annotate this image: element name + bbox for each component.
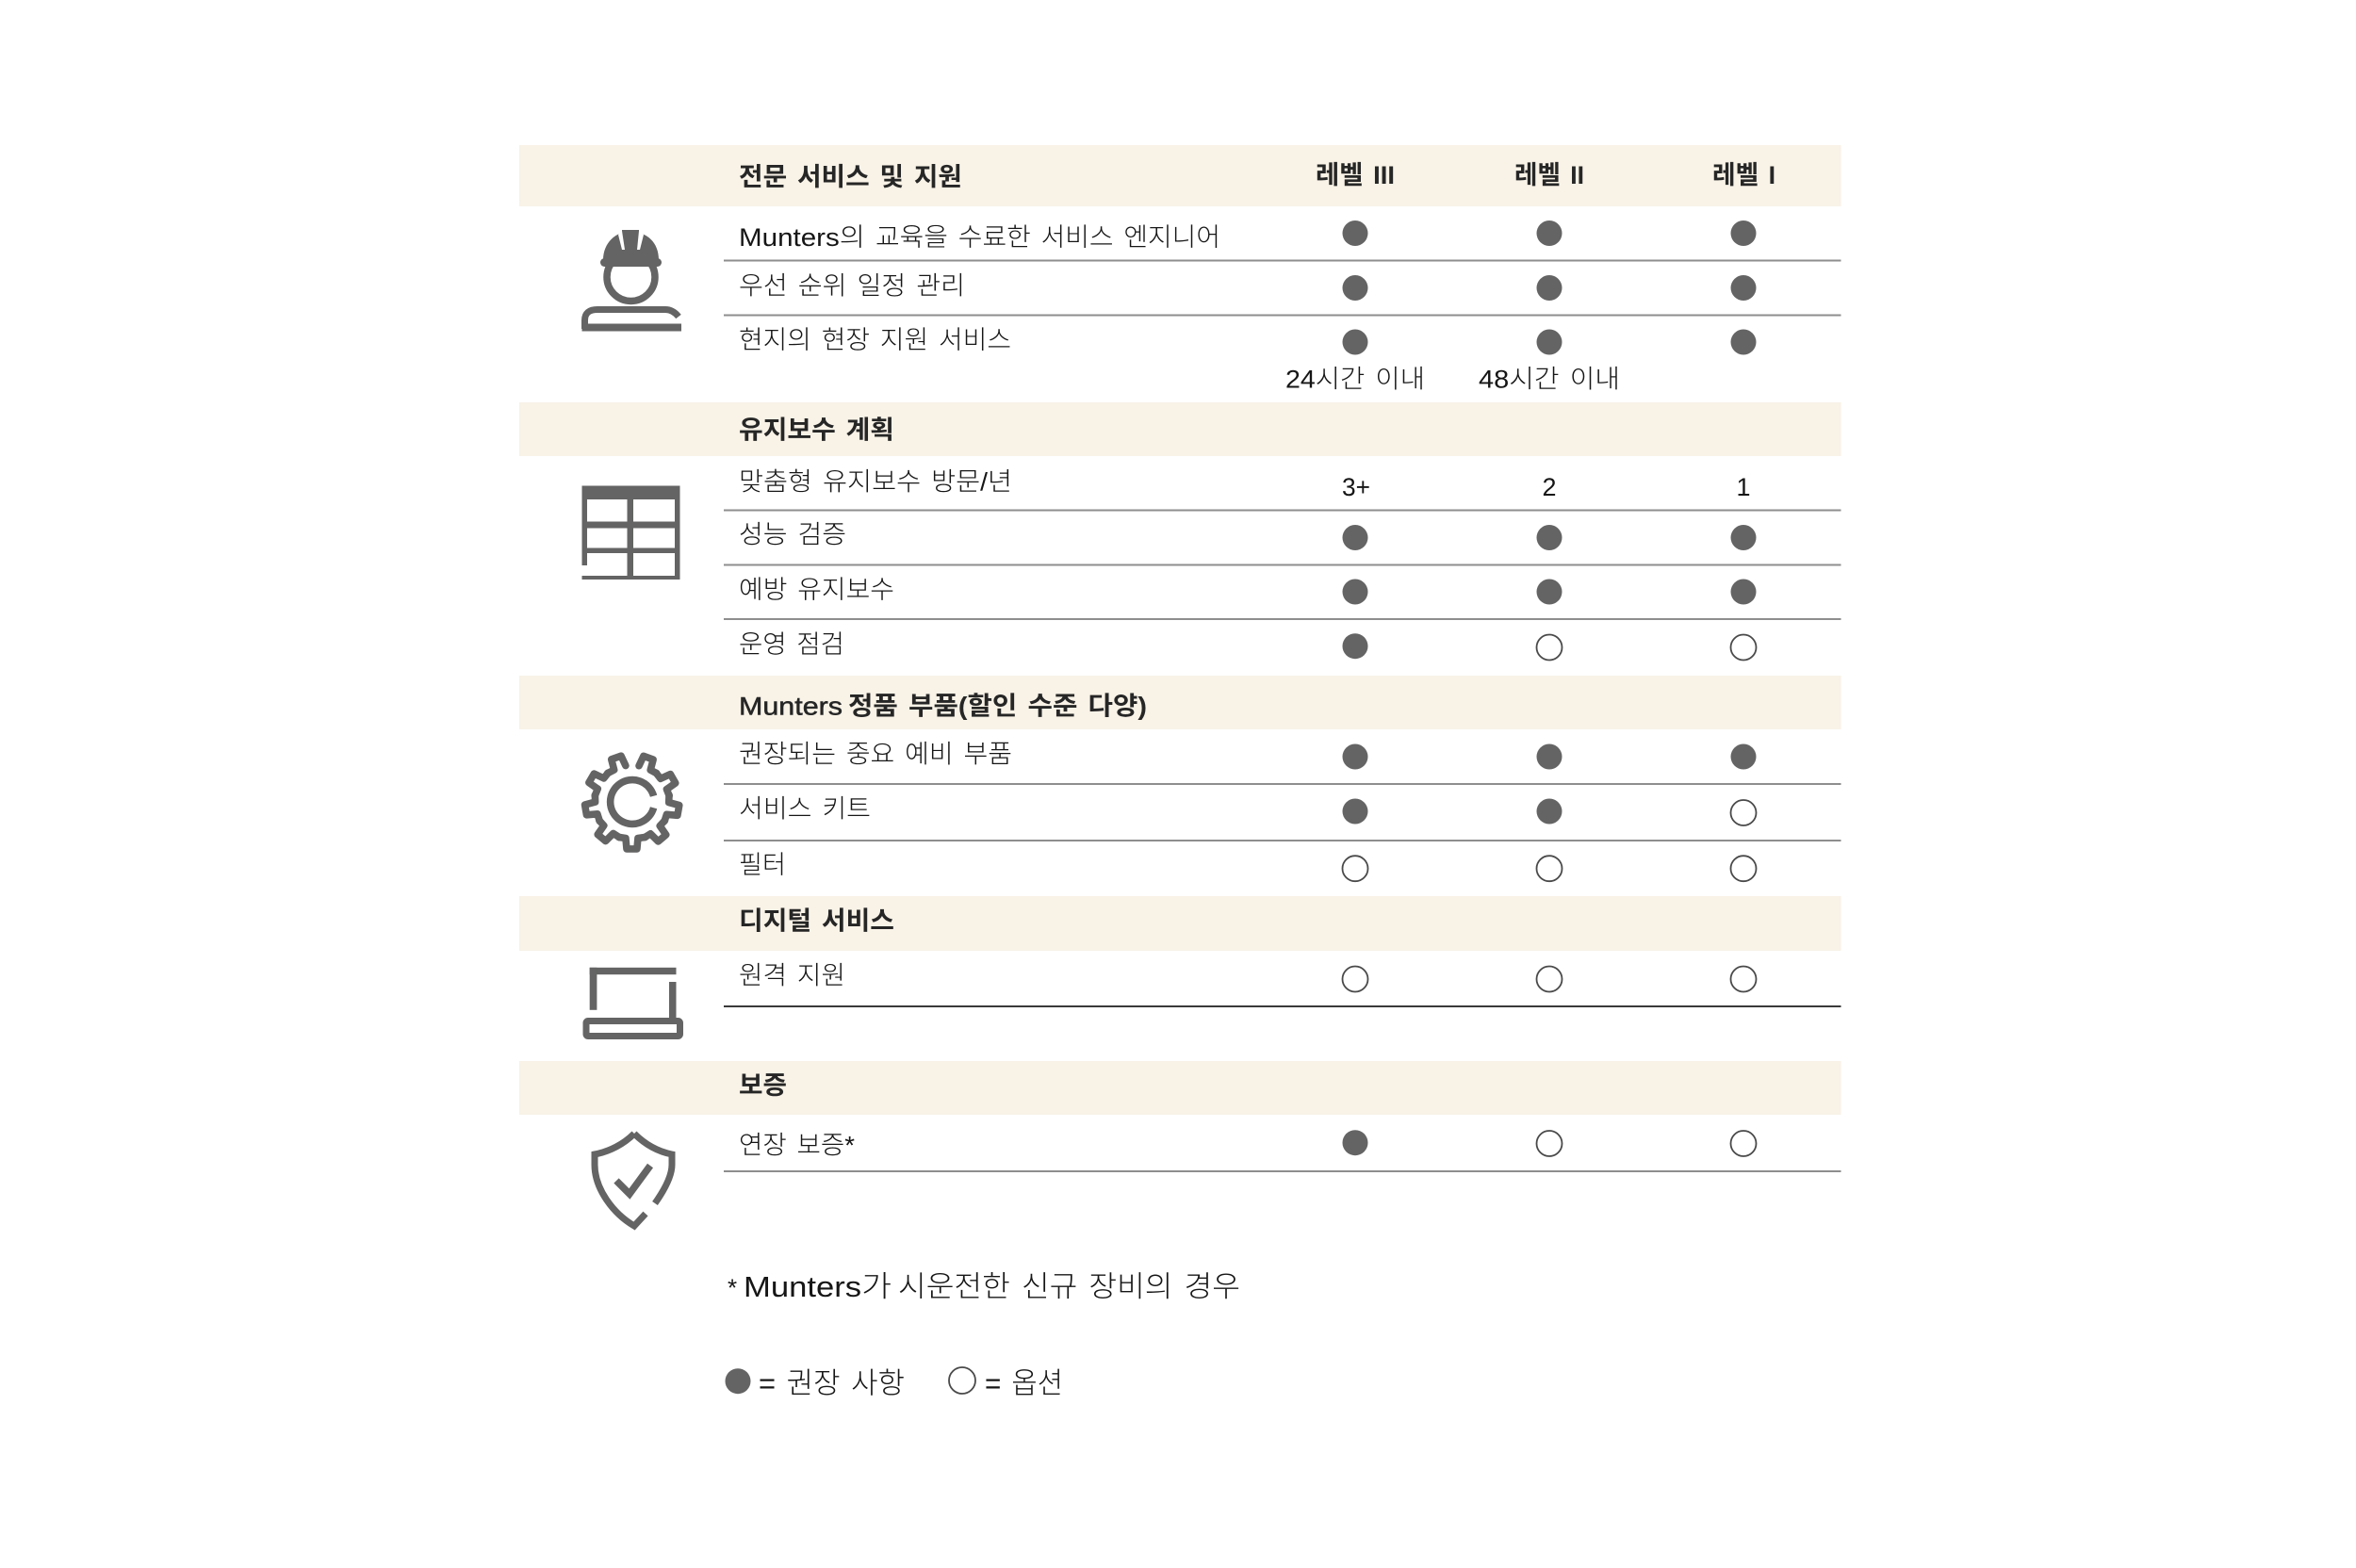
heading: warranty: 보증 [739,1071,787,1100]
section header band: parts [519,676,1841,729]
row: filters: 필터 [739,851,786,879]
row: priority scheduling [739,271,1757,301]
row: custom maintenance visits per year [739,467,1751,501]
panel: digital services [519,896,1841,1037]
row: local on-site support: 48시간 이내 [1479,366,1620,394]
row: trained service engineers [739,220,1757,252]
heading: digital services: 디지털 서비스 [739,906,894,935]
icon: laptop [586,968,680,1037]
row: extended warranty: 연장 보증* [739,1131,855,1159]
column heading: level I: 레벨 I [1712,161,1775,189]
panel: genuine Munters parts [519,676,1841,881]
icon: gear with C [583,756,680,849]
heading: genuine parts: 정품 부품(할인 수준 다양) [848,692,1147,720]
row: local on-site support: 현지의 현장 지원 서비스 [739,326,1011,354]
row: preventive maintenance [739,576,1757,605]
heading: services: 전문 서비스 및 지원 [739,163,962,191]
row: local on-site support [739,326,1757,394]
row: remote support: 원격 지원 [739,961,845,989]
legend: recommended: = 권장 사항 [759,1366,905,1400]
row: preventive maintenance: 예방 유지보수 [739,576,894,604]
icon: table schedule [582,486,680,580]
row: operational inspection [739,630,1757,660]
row: custom maintenance visits per year: 2 [1542,473,1557,501]
row: recommended critical spare parts [739,741,1757,769]
row: filters [739,851,1757,881]
panel: professional services and support [519,145,1841,394]
icon: worker with helmet [582,230,681,332]
row: trained service engineers: Munters의 [739,223,865,252]
row: custom maintenance visits per year: 1 [1736,473,1751,501]
row: service kits: 서비스 키트 [739,795,871,824]
row: operational inspection: 운영 점검 [739,630,844,659]
panel: warranty [519,1061,1841,1226]
row: custom maintenance visits per year: 맞춤형 유지보수 방문/년 [739,467,1012,496]
footnote: * [728,1274,737,1302]
row: local on-site support: 24시간 이내 [1285,366,1425,394]
row: priority scheduling: 우선 순위 일정 관리 [739,271,965,300]
section header band: warranty [519,1061,1841,1115]
section header band: services [519,145,1841,206]
legend: optional: = 옵션 [985,1366,1063,1400]
heading: maintenance plan: 유지보수 계획 [739,416,894,445]
legend [726,1366,1063,1400]
section header band: digital [519,896,1841,951]
icon: shield with check [595,1134,672,1226]
row: recommended critical spare parts: 권장되는 중요 예비 부품 [739,741,1012,769]
row: trained service engineers: 교육을 수료한 서비스 엔지니어 [875,223,1220,252]
footnote: Munters가 [744,1270,892,1303]
row: extended warranty [739,1130,1757,1159]
row: service kits [739,795,1757,825]
heading: genuine parts [739,692,1147,720]
heading: genuine parts: Munters [739,692,843,720]
footnote [728,1270,1240,1303]
row: custom maintenance visits per year: 3+ [1342,473,1370,501]
row: performance verification [739,520,1757,550]
row: remote support [739,961,1757,991]
footnote: 시운전한 신규 장비의 경우 [898,1270,1240,1303]
section header band: maintenance [519,402,1841,456]
column heading: level II: 레벨 II [1514,161,1584,189]
panel: maintenance plan [519,402,1841,660]
column heading: level III: 레벨 III [1316,161,1395,189]
row: performance verification: 성능 검증 [739,520,846,548]
legend: optional [949,1366,1063,1400]
